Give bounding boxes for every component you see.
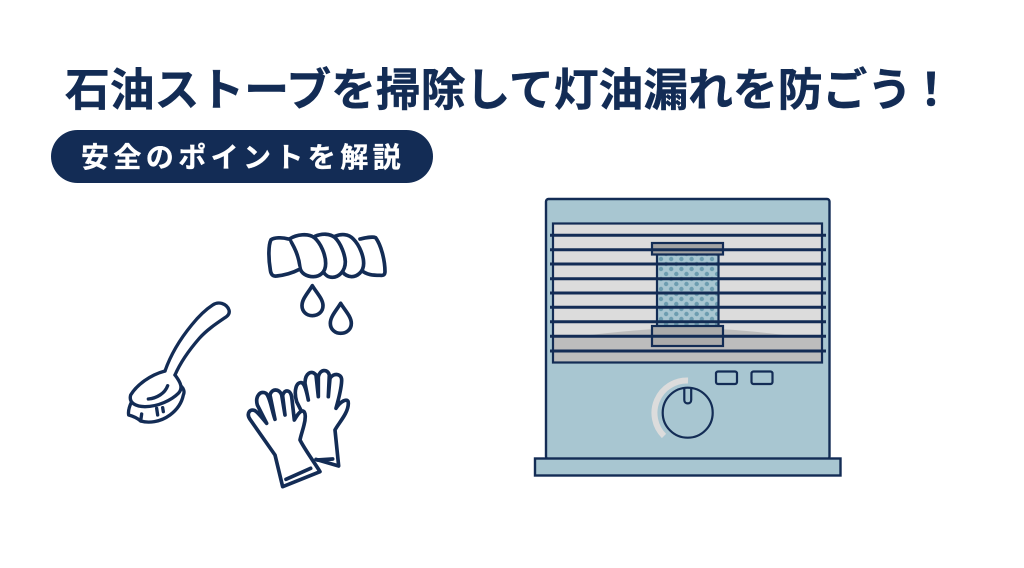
subtitle pill: 安全のポイントを解説 bbox=[81, 142, 405, 173]
burner wick bbox=[657, 254, 718, 326]
burner bottom cap bbox=[652, 326, 723, 346]
dial knob bbox=[663, 388, 713, 438]
icon: scrub brush bbox=[128, 303, 229, 422]
icon: rubber gloves bbox=[248, 371, 348, 487]
title: 石油ストーブを掃除して灯油漏れを防ごう！ bbox=[65, 66, 953, 116]
heater window bbox=[553, 224, 822, 362]
icon: cleaning rag with drops bbox=[269, 234, 385, 333]
heater base bbox=[535, 458, 840, 476]
illustration: kerosene heater bbox=[535, 199, 840, 476]
dial scale arc bbox=[654, 380, 688, 436]
burner top cap bbox=[652, 243, 723, 254]
buttons bbox=[716, 372, 772, 384]
heater body bbox=[546, 199, 830, 459]
subtitle pill bbox=[51, 130, 433, 183]
guard slats bbox=[550, 235, 826, 351]
